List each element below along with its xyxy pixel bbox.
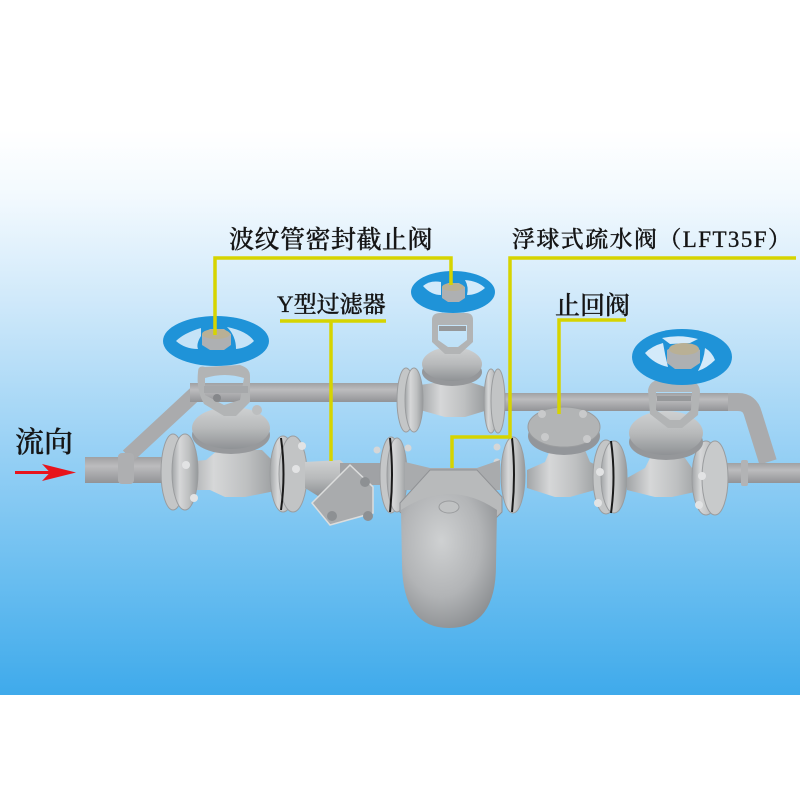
valve: Y strainer — [305, 460, 382, 525]
valve: float ball steam trap LFT35F — [374, 437, 525, 628]
bonnet — [192, 416, 270, 454]
flange — [593, 440, 627, 514]
yoke — [198, 365, 250, 416]
bonnet — [422, 358, 482, 386]
flange — [692, 441, 728, 515]
body — [185, 450, 280, 497]
label: bellows globe valve: 波纹管密封截止阀 — [229, 226, 433, 254]
nut — [202, 329, 231, 350]
leader line: check valve — [559, 320, 626, 414]
handwheel — [632, 329, 732, 385]
background gradient panel — [0, 130, 800, 695]
yoke — [648, 380, 700, 428]
nut — [667, 345, 700, 369]
body — [627, 458, 704, 497]
handwheel — [163, 316, 269, 366]
handwheel — [411, 271, 495, 313]
left flange — [397, 368, 423, 432]
body — [420, 382, 488, 417]
label: float ball steam trap: 浮球式疏水阀（LFT35F） — [512, 227, 792, 252]
valve: middle bellows globe valve — [397, 271, 505, 433]
inlet flange — [374, 437, 412, 513]
outlet flange — [494, 437, 525, 513]
cover — [400, 470, 502, 520]
arrow: flow direction — [15, 464, 76, 481]
cover — [528, 417, 600, 455]
piping: bypass and main line — [85, 383, 800, 486]
valve: left bellows globe valve — [161, 316, 307, 512]
leader line: Y strainer — [280, 321, 386, 461]
label: flow direction: 流向 — [15, 426, 73, 459]
leader line: float ball steam trap — [452, 258, 796, 468]
body — [527, 450, 602, 497]
left flange — [161, 434, 198, 510]
label: check valve: 止回阀 — [555, 292, 630, 320]
label: Y strainer: Y型过滤器 — [277, 292, 386, 317]
right flange — [484, 369, 505, 433]
bonnet — [629, 424, 703, 460]
valve: check valve — [527, 407, 627, 514]
valve: right bellows globe valve — [627, 329, 732, 515]
leader lines: bellows globe valve — [215, 258, 451, 335]
nut — [442, 283, 465, 302]
neck — [405, 460, 500, 490]
right flange — [270, 436, 307, 512]
bowl — [401, 494, 497, 628]
yoke — [432, 313, 473, 354]
